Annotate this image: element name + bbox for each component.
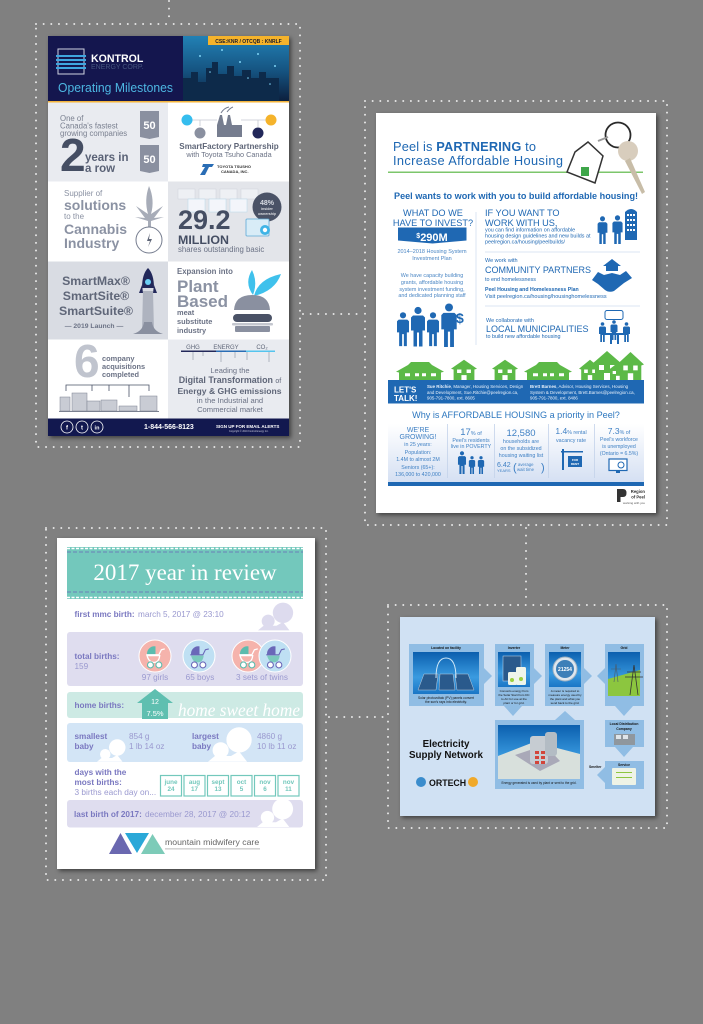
cell: digital transformation: GHG bbox=[186, 345, 200, 351]
cell: acquisitions: completed bbox=[102, 370, 139, 379]
header: Kontrol brand: KONTROL bbox=[91, 53, 144, 65]
cell: digital transformation bbox=[168, 340, 289, 418]
cell: digital transformation: Energy & GHG emissions bbox=[177, 386, 282, 396]
cell: plant based bbox=[168, 262, 289, 340]
stat: waiting list bbox=[497, 428, 545, 474]
invest column: 290M bbox=[420, 232, 448, 244]
cell: cannabis supplier: to the bbox=[64, 212, 85, 221]
icon row: green houses bbox=[396, 351, 644, 380]
step: inverter: to AC for use at the bbox=[501, 697, 527, 701]
step: solar panels on facility bbox=[413, 646, 479, 704]
cell: fastest growing: 50 bbox=[143, 154, 156, 166]
stat: poverty bbox=[451, 427, 492, 474]
contact band: let's talk: System & Development, Brett.Barnes@peelregion.ca, bbox=[530, 390, 635, 395]
step: meter bbox=[548, 646, 582, 705]
cell: digital transformation: in the Industrial and bbox=[197, 396, 263, 405]
logo: Region of Peel: Region bbox=[631, 489, 645, 494]
home births row: home births: bbox=[74, 701, 124, 710]
stat: growing: in 25 years: bbox=[404, 442, 432, 448]
title: electricity supply network: Electricity bbox=[423, 739, 470, 750]
days with most births: oct bbox=[237, 779, 247, 786]
section: community partners bbox=[485, 258, 632, 300]
step: meter: measure energy used by bbox=[548, 693, 582, 697]
step: meter: A meter is required to bbox=[551, 689, 580, 693]
icon: twins prams bbox=[232, 640, 291, 672]
cell: plant based: meat bbox=[177, 308, 195, 317]
cell: fastest growing: growing companies bbox=[60, 129, 127, 138]
step: inverter bbox=[498, 646, 530, 705]
contact band: let's talk: Sue Ritchie, Manager, Housing Services, Design bbox=[427, 384, 524, 389]
step: inverter: Inverter bbox=[508, 646, 521, 650]
stat: vacancy bbox=[555, 426, 587, 470]
icon: house keychain bbox=[567, 122, 645, 194]
subheading: Peel wants to work with you to build affordable housing! bbox=[394, 191, 638, 201]
cell: 29.2 million shares: ownership bbox=[258, 211, 277, 216]
cell: plant based: Expansion into bbox=[177, 267, 233, 276]
invest column: HAVE TO INVEST? bbox=[393, 218, 473, 228]
flow panels and arrows bbox=[409, 644, 644, 789]
logo: mountain midwifery care: mountain midwifery care bbox=[165, 837, 259, 847]
step: meter: the plant and what you bbox=[550, 697, 580, 701]
icon: girls pram bbox=[139, 640, 171, 672]
days with most births: 11 bbox=[285, 786, 292, 793]
cell: acquisitions: 6 bbox=[74, 335, 100, 387]
stat: waiting list: YEARS bbox=[497, 468, 511, 473]
step: meter: 21254 bbox=[558, 667, 572, 673]
days with most births: sept bbox=[212, 779, 225, 786]
days with most births: nov bbox=[259, 779, 271, 786]
icon: baby silhouette bbox=[258, 603, 293, 630]
step: energy used by plant: Energy generated is used by plant or sent to the grid. bbox=[502, 781, 577, 785]
stat: waiting list: ( bbox=[513, 462, 517, 474]
step: grid bbox=[608, 646, 643, 696]
days with most births: june bbox=[164, 779, 178, 786]
panel: electricity supply network bbox=[400, 617, 655, 816]
cell: digital transformation: Commercial market bbox=[197, 405, 264, 414]
title: electricity supply network bbox=[409, 739, 484, 761]
panel: Peel affordable housing: Increase Affordable Housing bbox=[393, 153, 563, 168]
first birth row: march 5, 2017 @ 23:10 bbox=[138, 610, 224, 619]
calendars bbox=[160, 776, 299, 796]
cell: 29.2 million shares: shares outstanding basic bbox=[178, 245, 264, 254]
last birth row bbox=[67, 798, 303, 828]
smallest and largest baby row bbox=[67, 723, 303, 762]
last birth row: last birth of 2017: bbox=[74, 810, 142, 819]
stat: waiting list: wait time bbox=[517, 467, 535, 472]
panel: 2017 year in review bbox=[57, 538, 315, 869]
cell: plant based: Based bbox=[177, 292, 228, 311]
section: local municipalities bbox=[486, 310, 630, 344]
total births row: total births: bbox=[74, 652, 120, 661]
icon: house with number: 12 bbox=[151, 699, 159, 706]
contact band: let's talk bbox=[388, 380, 644, 404]
total births row: 3 sets of twins bbox=[236, 673, 288, 682]
stat: waiting list: households are bbox=[503, 439, 539, 445]
step: meter: send back to the grid. bbox=[551, 701, 580, 705]
cell: 29.2 million shares: MILLION bbox=[178, 233, 229, 247]
icon: rocket bbox=[133, 268, 163, 334]
cell: SmartFactory partnership bbox=[168, 102, 289, 182]
total births row: 159 bbox=[74, 662, 89, 671]
step: meter: Meter bbox=[560, 646, 570, 650]
step: solar panels on facility: Located on facility bbox=[431, 646, 461, 650]
ticker tag bbox=[208, 36, 289, 45]
stat: waiting list: on the subsidized bbox=[500, 446, 542, 452]
stat: waiting list: 12,580 bbox=[506, 428, 536, 439]
days with most births: most births: bbox=[74, 778, 122, 787]
cell: fastest growing: years in bbox=[85, 152, 128, 164]
section: community partners: to end homelessness bbox=[485, 277, 536, 283]
section: community partners: COMMUNITY PARTNERS bbox=[485, 265, 591, 275]
footer bar bbox=[48, 418, 289, 436]
step: inverter: the Solar Start from DC bbox=[498, 693, 530, 697]
invest column bbox=[393, 208, 473, 347]
stat: waiting list: ) bbox=[541, 462, 545, 474]
icon: boys pram bbox=[183, 640, 215, 672]
section: work with us: housing design guidelines and new builds at bbox=[485, 234, 591, 240]
banner bbox=[67, 547, 303, 599]
statistics strip bbox=[388, 424, 644, 486]
stat: vacancy: vacancy rate bbox=[556, 438, 586, 444]
cell: acquisitions: company bbox=[102, 354, 135, 363]
title: electricity supply network: Supply Network bbox=[409, 750, 484, 761]
section: work with us: IF YOU WANT TO bbox=[485, 208, 560, 218]
cell: digital transformation: Leading the bbox=[210, 366, 250, 375]
stat: growing bbox=[395, 427, 441, 478]
cell: SmartFactory partnership: with Toyota Tsuho Canada bbox=[185, 150, 273, 159]
first birth row bbox=[74, 603, 293, 630]
header image: city skyline bbox=[183, 36, 289, 101]
invest column: We have capacity building bbox=[401, 273, 463, 279]
cell: cannabis supplier bbox=[48, 182, 168, 262]
title: Peel is PARTNERING to bbox=[393, 139, 536, 154]
step: solar panels on facility: Solar photovoltaic (PV) panels convert bbox=[418, 696, 474, 700]
stat: growing: WE'RE bbox=[407, 427, 429, 434]
days with most births: 3 births each day on... bbox=[74, 787, 156, 797]
step: grid: Grid bbox=[621, 646, 627, 650]
logo: Region of Peel: of Peel bbox=[631, 494, 645, 500]
logo: Region of Peel bbox=[617, 489, 645, 505]
section: work with us: you can find information on affordable bbox=[485, 228, 575, 234]
section: community partners: Visit peelregion.ca/housing/housinghomelessness bbox=[485, 294, 607, 300]
banner: 2017 year in review bbox=[93, 560, 277, 585]
cell: acquisitions bbox=[48, 335, 168, 418]
smallest and largest baby row: 10 lb 11 oz bbox=[257, 742, 296, 751]
total births row bbox=[67, 632, 303, 686]
cell: 29.2 million shares: insider bbox=[261, 206, 274, 211]
cell: SmartMax product launch: — 2019 Launch — bbox=[65, 323, 123, 330]
stat: unemployment bbox=[600, 426, 638, 473]
contact band: let's talk: 905-791-7800, ext. 8605 bbox=[427, 396, 475, 400]
contact band: let's talk: TALK! bbox=[394, 394, 417, 403]
days with most births bbox=[74, 768, 299, 797]
step: solar panels on facility: the sun's rays into electricity. bbox=[425, 700, 467, 704]
home births row: home sweet home bbox=[178, 700, 300, 720]
step: service: Smelter bbox=[589, 765, 602, 769]
panel: Kontrol operating milestones bbox=[48, 36, 289, 436]
invest column: 2014–2018 Housing System bbox=[397, 249, 467, 255]
stat: vacancy: RENT bbox=[571, 462, 579, 466]
contact band: let's talk: LET'S bbox=[394, 386, 417, 394]
smallest and largest baby row: baby bbox=[192, 742, 212, 751]
contact band: let's talk: and Development, Sue.Ritchie@peelregion.ca, bbox=[427, 390, 518, 395]
icon: staff with dollar sign: $ bbox=[456, 310, 464, 326]
section: work with us bbox=[485, 208, 637, 246]
days with most births: 24 bbox=[167, 786, 175, 793]
first birth row: first mmc birth: bbox=[74, 610, 135, 619]
invest column: and dedicated planning staff bbox=[398, 293, 466, 299]
cell: fastest growing: a row bbox=[85, 163, 115, 175]
section: community partners: We work with bbox=[485, 258, 518, 264]
total births row: 97 girls bbox=[142, 673, 168, 682]
cell: SmartMax product launch: SmartSuite® bbox=[59, 304, 133, 318]
section: local municipalities: LOCAL MUNICIPALITIES bbox=[486, 324, 589, 334]
invest column: Investment Plan bbox=[412, 256, 452, 262]
step: service bbox=[589, 763, 636, 785]
cell: SmartMax product launch bbox=[48, 262, 168, 340]
cell: SmartMax product launch: SmartSite® bbox=[63, 289, 129, 303]
logo: Ortech: ORTECH bbox=[429, 778, 466, 788]
smallest and largest baby row: 854 g bbox=[129, 732, 150, 741]
footer bar: in bbox=[95, 426, 100, 432]
step: local distribution company: Company bbox=[616, 727, 632, 731]
stat: poverty: live in POVERTY bbox=[451, 444, 492, 450]
cell: plant based: industry bbox=[177, 326, 207, 335]
section: local municipalities: to build new affordable housing bbox=[486, 334, 561, 340]
smallest and largest baby row: smallest bbox=[74, 732, 108, 741]
dotted frames and connectors bbox=[36, 1, 667, 880]
days with most births: aug bbox=[189, 779, 200, 786]
cell: fastest growing bbox=[48, 102, 168, 182]
stat: growing: GROWING! bbox=[400, 434, 437, 441]
cell: fastest growing: One of bbox=[60, 114, 84, 123]
section: work with us: WORK WITH US, bbox=[485, 218, 557, 228]
icon: burger with leaves bbox=[232, 270, 281, 332]
invest column: system investment funding, bbox=[399, 287, 465, 293]
cell: SmartFactory partnership: SmartFactory Partnership bbox=[179, 142, 279, 151]
cell: plant based: Plant bbox=[177, 277, 219, 296]
contact band: let's talk: Brett Barnes, Advisor, Housing Services, Housing bbox=[530, 384, 629, 389]
icon: handshake with house bbox=[592, 259, 632, 292]
stat: unemployment: is unemployed bbox=[602, 444, 636, 450]
stat: growing: 1.4M to almost 2M bbox=[396, 457, 440, 463]
footer bar: f bbox=[66, 426, 69, 432]
days with most births: nov bbox=[283, 779, 295, 786]
logo: Region of Peel: working with you bbox=[623, 501, 645, 505]
total births row: 65 boys bbox=[186, 673, 214, 682]
days with most births: 17 bbox=[191, 786, 198, 793]
header: Kontrol brand bbox=[48, 36, 183, 101]
cell: 29.2 million shares: 29.2 bbox=[178, 205, 231, 235]
stat: growing: Seniors (65+): bbox=[401, 465, 435, 471]
section: work with us: peelregion.ca/housing/peelbuilds/ bbox=[485, 240, 566, 246]
smallest and largest baby row: 1 lb 14 oz bbox=[129, 742, 165, 751]
cell: SmartFactory partnership: TOYOTA TSUSHO bbox=[217, 164, 251, 169]
footer bar: t bbox=[81, 426, 83, 432]
logo: Ortech bbox=[416, 777, 478, 788]
panel: Peel affordable housing bbox=[376, 113, 656, 513]
stat: vacancy: FOR bbox=[572, 458, 579, 462]
footer bar: Copyright © 2019 Kontrol Energy Inc. bbox=[229, 430, 269, 433]
smallest and largest baby row: largest bbox=[192, 732, 219, 741]
cell: digital transformation: CO₂ bbox=[256, 345, 268, 351]
heading: why affordable housing: Why is AFFORDABLE HOUSING a priority in Peel? bbox=[412, 410, 620, 420]
icon: meeting table bbox=[599, 310, 630, 344]
cell: plant based: substitute bbox=[177, 317, 212, 326]
cell: SmartMax product launch: SmartMax® bbox=[62, 274, 130, 288]
stat: vacancy: 1.4% rental bbox=[555, 426, 587, 436]
cell: cannabis supplier: Industry bbox=[64, 235, 119, 251]
icon: house with number bbox=[137, 689, 173, 719]
stat: waiting list: housing waiting list bbox=[499, 453, 544, 459]
footer bar: SIGN UP FOR EMAIL ALERTS bbox=[216, 424, 279, 429]
stat: poverty: 17% of bbox=[460, 427, 482, 438]
cell: digital transformation: Digital Transformation of bbox=[179, 375, 281, 385]
cell: acquisitions: acquisitions bbox=[102, 362, 145, 371]
section: local municipalities: We collaborate with bbox=[486, 318, 534, 324]
step: service: Service bbox=[618, 763, 630, 767]
cell: cannabis supplier: Cannabis bbox=[64, 221, 127, 237]
invest column: $ bbox=[416, 233, 420, 240]
cell: fastest growing: 2 bbox=[60, 129, 86, 181]
stat: growing: 136,000 to 420,000 bbox=[395, 472, 441, 478]
last birth row: december 28, 2017 @ 20:12 bbox=[145, 809, 251, 819]
days with most births: 5 bbox=[240, 786, 244, 793]
contact band: let's talk: 905-791-7800, ext. 8486 bbox=[530, 396, 578, 400]
icon: house with number: 7.5% bbox=[146, 709, 164, 718]
stat: unemployment: (Ontario = 6.5%) bbox=[600, 451, 638, 457]
stat: waiting list: 6.42 bbox=[497, 462, 511, 469]
days with most births: days with the bbox=[74, 768, 127, 777]
ticker tag: CSE:KNR / OTCQB : KNRLF bbox=[215, 39, 282, 45]
smallest and largest baby row: baby bbox=[74, 742, 94, 751]
days with most births: 6 bbox=[263, 786, 267, 793]
step: inverter: Converts energy from bbox=[500, 689, 529, 693]
cell: 29.2 million shares: 48% bbox=[260, 200, 275, 207]
step: local distribution company bbox=[610, 722, 638, 745]
cell: cannabis supplier: solutions bbox=[64, 197, 126, 213]
smallest and largest baby row: 4860 g bbox=[257, 732, 282, 741]
cell: SmartFactory partnership: CANADA, INC. bbox=[221, 169, 249, 174]
stat: unemployment: 7.3% of bbox=[608, 426, 631, 436]
step: local distribution company: Local Distribution bbox=[610, 722, 638, 726]
home births row bbox=[67, 689, 303, 720]
header: Kontrol brand: Operating Milestones bbox=[58, 80, 173, 95]
step: energy used by plant bbox=[498, 725, 580, 785]
cell: cannabis supplier: Supplier of bbox=[64, 189, 103, 198]
days with most births: 13 bbox=[214, 786, 222, 793]
section: community partners: Peel Housing and Homelessness Plan bbox=[485, 287, 579, 293]
stat: growing: Population: bbox=[405, 450, 431, 456]
invest column: WHAT DO WE bbox=[403, 208, 463, 218]
header: Kontrol brand: ENERGY CORP. bbox=[91, 64, 144, 71]
cell: digital transformation: ENERGY bbox=[213, 345, 239, 351]
cell: fastest growing: Canada's fastest bbox=[60, 122, 119, 130]
stat: poverty: Peel's residents bbox=[452, 438, 490, 444]
stat: unemployment: Peel's workforce bbox=[600, 437, 638, 443]
invest column: grants, affordable housing bbox=[401, 280, 463, 286]
logo: mountain midwifery care bbox=[109, 833, 260, 854]
stat: waiting list: average bbox=[518, 462, 534, 467]
cell: 29.2 million shares bbox=[168, 182, 289, 262]
step: inverter: plant or for grid. bbox=[503, 701, 525, 705]
cell: fastest growing: 50 bbox=[143, 120, 156, 132]
footer bar: 1-844-566-8123 bbox=[144, 424, 194, 431]
